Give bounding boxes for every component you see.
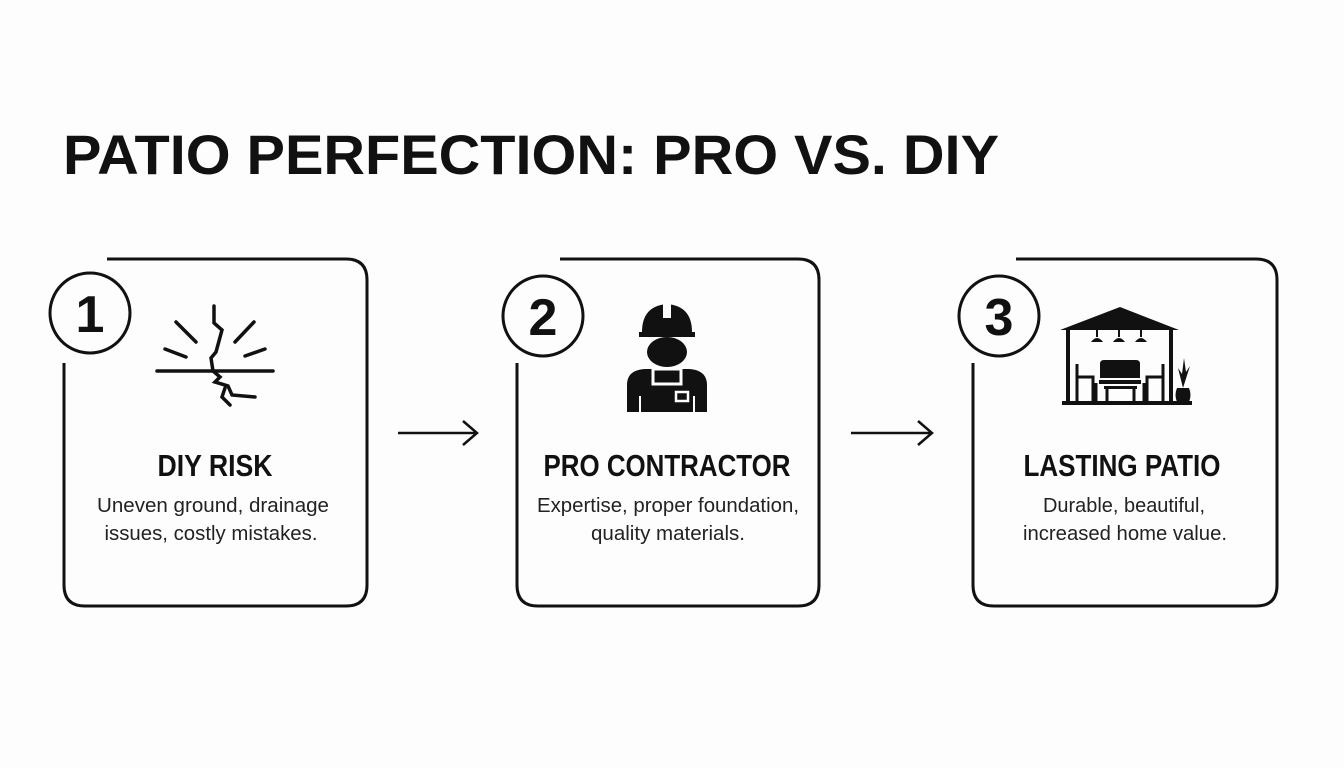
text: DIY description: issues, costly mistakes. bbox=[104, 523, 318, 545]
text: pro description: Expertise, proper foundation, bbox=[537, 495, 799, 517]
number badge 2 bbox=[503, 276, 583, 356]
text: pro description: quality materials. bbox=[591, 523, 745, 545]
heading: PRO CONTRACTOR: PRO CONTRACTOR bbox=[544, 448, 790, 483]
heading: DIY RISK: DIY RISK bbox=[158, 448, 273, 483]
number badge 1: 1 bbox=[76, 286, 104, 344]
text: lasting description: increased home value. bbox=[1023, 523, 1227, 545]
number badge 1 bbox=[50, 273, 130, 353]
icon: cracked ground bbox=[157, 306, 273, 405]
arrow 2 bbox=[851, 421, 932, 445]
panel: pro contractor bbox=[503, 259, 819, 606]
text: lasting description: Durable, beautiful, bbox=[1043, 495, 1205, 517]
panel: DIY risk bbox=[50, 259, 367, 606]
text: DIY description bbox=[97, 495, 329, 545]
title: PATIO PERFECTION: PRO VS. DIY bbox=[63, 123, 999, 186]
text: lasting description bbox=[1023, 495, 1227, 545]
number badge 2: 2 bbox=[529, 289, 557, 347]
heading: LASTING PATIO: LASTING PATIO bbox=[1024, 448, 1220, 483]
icon: pergola bbox=[1060, 307, 1192, 405]
icon: worker bbox=[627, 304, 707, 412]
number badge 3: 3 bbox=[985, 289, 1013, 347]
arrow 1 bbox=[398, 421, 477, 445]
text: DIY description: Uneven ground, drainage bbox=[97, 495, 329, 517]
text: pro description bbox=[537, 495, 799, 545]
number badge 3 bbox=[959, 276, 1039, 356]
panel: lasting patio bbox=[959, 259, 1277, 606]
